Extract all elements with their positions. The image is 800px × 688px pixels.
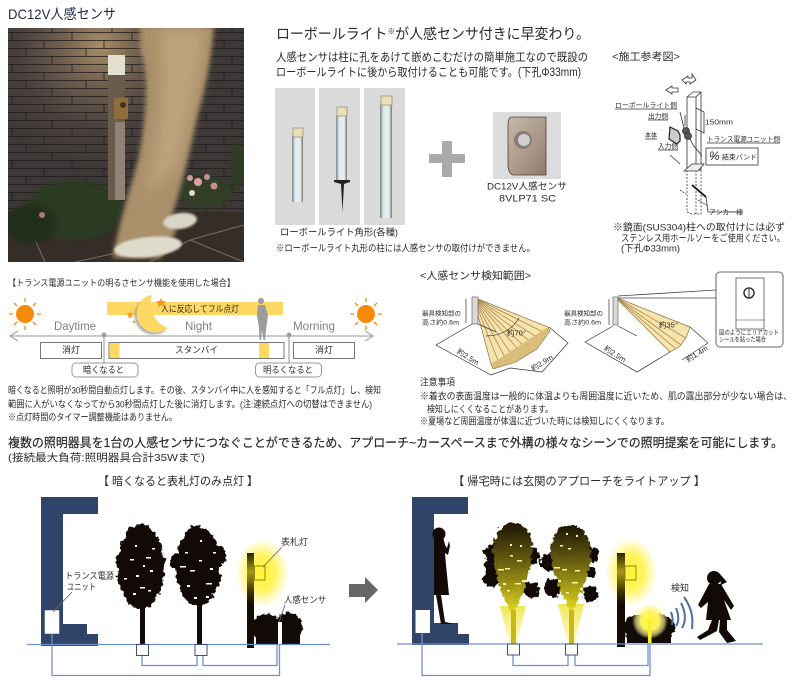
diagram labels: % bbox=[709, 149, 720, 163]
diagram labels: トランス電源ユニット側 bbox=[707, 134, 780, 144]
diagram drawing bbox=[615, 74, 780, 214]
detection fan 70 degrees bbox=[436, 297, 568, 375]
detection fan 35 labels bbox=[564, 308, 710, 364]
detection waves bbox=[671, 597, 692, 629]
inset: area cut seal bbox=[618, 272, 783, 347]
junction boxes bbox=[508, 644, 578, 655]
detection fan 35 labels: 約2.5m bbox=[602, 343, 628, 364]
cautions: 検知しにくくなることがあります。 bbox=[427, 404, 553, 416]
cautions: 注意事項 bbox=[420, 376, 455, 388]
cautions: ※夏場など周囲温度が体温に近づいた時には検知しにくくなります。 bbox=[420, 416, 669, 428]
time labels: Daytime bbox=[54, 321, 96, 333]
icon: plus bbox=[429, 141, 465, 177]
timeline description: ※点灯時間のタイマー調整機能はありません。 bbox=[8, 412, 177, 424]
label: detected: 検知 bbox=[671, 582, 689, 593]
installation diagram bbox=[612, 50, 785, 254]
detection fan 70 labels: 高さ約0.6m bbox=[422, 318, 459, 326]
detection fan 70 labels bbox=[422, 308, 555, 373]
lit tree left bbox=[483, 523, 540, 644]
detection fan 35 labels: 器具検知部の bbox=[564, 308, 603, 318]
detection fan 35 labels: 高さ約0.6m bbox=[564, 318, 601, 326]
icon: left sun bbox=[9, 298, 41, 330]
label: name plate lamp: 表札灯 bbox=[281, 536, 308, 547]
photo: lit post and walking person bbox=[4, 26, 246, 262]
icon: moon and stars bbox=[126, 295, 168, 335]
status: off right: 消灯 bbox=[315, 344, 333, 355]
status: standby: スタンバイ bbox=[175, 345, 218, 355]
scene: coming home bbox=[397, 475, 763, 676]
label: motion sensor: 人感センサ bbox=[284, 594, 326, 605]
name plate lamp with glow bbox=[605, 537, 657, 647]
intro text: ローボールライトに後から取付けることも可能です。(下孔Φ33mm) bbox=[276, 65, 581, 79]
full lighting band bbox=[107, 302, 283, 315]
scene heading: dusk: 【 暗くなると表札灯のみ点灯 】 bbox=[98, 475, 258, 488]
product: sensor bbox=[493, 112, 561, 179]
detection range panel bbox=[420, 269, 792, 428]
name plate lamp with glow bbox=[235, 538, 289, 648]
timeline description: 範囲に人がいなくなってから30秒間点灯した後に消灯します。(注:連続点灯への切替はできません) bbox=[8, 398, 372, 410]
intro text: 人感センサは柱に孔をあけて嵌めこむだけの簡単施工なので既設の bbox=[276, 50, 588, 64]
title: DC12V人感センサ bbox=[8, 6, 116, 22]
diagram labels bbox=[615, 102, 780, 216]
sensor post bbox=[278, 622, 282, 644]
timeline panel bbox=[8, 277, 382, 377]
house wall bbox=[412, 497, 469, 645]
diagram labels: 入力側 bbox=[658, 142, 678, 150]
heading: low ball light: ローボールライト bbox=[276, 27, 392, 43]
product: low ball lights bbox=[275, 88, 405, 225]
status: off right bbox=[294, 342, 354, 358]
lit tree right bbox=[540, 525, 598, 644]
diagram labels: 150mm bbox=[705, 118, 733, 126]
woman silhouette bbox=[432, 528, 455, 624]
diagram labels: 出力側 bbox=[648, 112, 668, 120]
heading: low ball light: ※ bbox=[387, 26, 395, 36]
diagram labels: アンカー棒 bbox=[709, 208, 743, 216]
tree right bbox=[170, 526, 226, 644]
girl silhouette bbox=[697, 571, 736, 643]
cautions bbox=[420, 376, 792, 428]
wiring bbox=[397, 633, 763, 676]
lit bushes bbox=[624, 603, 674, 644]
detection fan 70 labels: 約2.5m bbox=[455, 346, 481, 367]
inset: area cut seal: 図のようにエリアカット bbox=[719, 328, 779, 336]
main statement: 複数の照明器具を1台の人感センサにつなぐことができるため、アプローチ~カースペースまで外構の様々なシーンでの照明提案を可能にします。 bbox=[8, 435, 783, 450]
callout: getting dark: 暗くなると bbox=[83, 365, 124, 375]
time labels: Night bbox=[185, 321, 213, 333]
installation note: (下孔Φ33mm) bbox=[621, 244, 680, 254]
installation note: ※鏡面(SUS304)柱への取付けには必ず bbox=[613, 222, 785, 234]
detection fan 70 labels: 約70° bbox=[507, 328, 526, 338]
callout lines bbox=[53, 547, 285, 622]
load note: (接続最大負荷:照明器具合計35Wまで) bbox=[8, 451, 205, 464]
installation note bbox=[613, 222, 785, 254]
icon: right sun bbox=[350, 298, 382, 330]
junction boxes bbox=[136, 644, 207, 656]
detection fan 70 labels: 器具検知部の bbox=[422, 308, 461, 318]
diagram labels: 本体 bbox=[645, 130, 657, 140]
scene: dusk bbox=[27, 475, 330, 676]
time axis arrow bbox=[10, 331, 373, 363]
diagram labels: 結束バンド bbox=[722, 152, 757, 162]
caption: sensor bbox=[487, 180, 567, 204]
callout: getting bright bbox=[256, 363, 322, 377]
transformer unit bbox=[44, 610, 60, 634]
arrow between scenes bbox=[349, 577, 378, 603]
label: transformer: トランス電源 bbox=[65, 571, 114, 581]
time labels bbox=[54, 321, 335, 333]
label: transformer: ユニット bbox=[67, 582, 96, 592]
note: round type: ※ローボールライト丸形の柱には人感センサの取付けができません。 bbox=[276, 242, 535, 254]
timeline description: 暗くなると照明が30秒間自動点灯します。その後、スタンバイ中に人を感知すると「フル点灯」し、検知 bbox=[8, 384, 381, 396]
status: off left: 消灯 bbox=[62, 344, 80, 355]
detection fan 35 degrees bbox=[585, 297, 708, 372]
wiring bbox=[27, 634, 330, 676]
tree left bbox=[116, 525, 166, 644]
label: transformer bbox=[65, 571, 114, 592]
callout: getting bright: 明るくなると bbox=[263, 365, 313, 375]
detection fan 70 labels: 約2.9m bbox=[529, 352, 555, 373]
status: off left bbox=[40, 342, 102, 358]
scene heading: coming home: 【 帰宅時には玄関のアプローチをライトアップ 】 bbox=[453, 475, 705, 488]
status: standby bbox=[109, 342, 284, 358]
callout: getting dark bbox=[72, 363, 138, 377]
timeline heading: 【トランス電源ユニットの明るさセンサ機能を使用した場合】 bbox=[8, 277, 235, 288]
heading: low ball light: が人感センサ付きに早変わり。 bbox=[395, 26, 590, 43]
timeline description bbox=[8, 384, 381, 424]
full lighting band: 人に反応してフル点灯 bbox=[161, 304, 239, 314]
detection fan 35 labels: 約35° bbox=[659, 320, 678, 330]
intro text bbox=[276, 50, 588, 79]
time labels: Morning bbox=[293, 321, 335, 333]
bushes bbox=[252, 613, 303, 644]
transformer unit bbox=[416, 610, 430, 633]
caption: low ball light: ローボールライト角形(各種) bbox=[280, 226, 398, 238]
diagram labels: ローボールライト側 bbox=[615, 102, 677, 110]
inset: area cut seal: シールを貼った場合 bbox=[719, 334, 766, 344]
caption: sensor: DC12V人感センサ bbox=[487, 180, 567, 192]
icon: person bbox=[257, 298, 268, 340]
heading: installation: <施工参考図> bbox=[612, 50, 680, 63]
detection fan 35 labels: 約1.4m bbox=[684, 343, 710, 364]
caption: sensor: 8VLP71 SC bbox=[499, 194, 556, 204]
detection heading: <人感センサ検知範囲> bbox=[420, 269, 531, 282]
house wall bbox=[41, 497, 98, 646]
